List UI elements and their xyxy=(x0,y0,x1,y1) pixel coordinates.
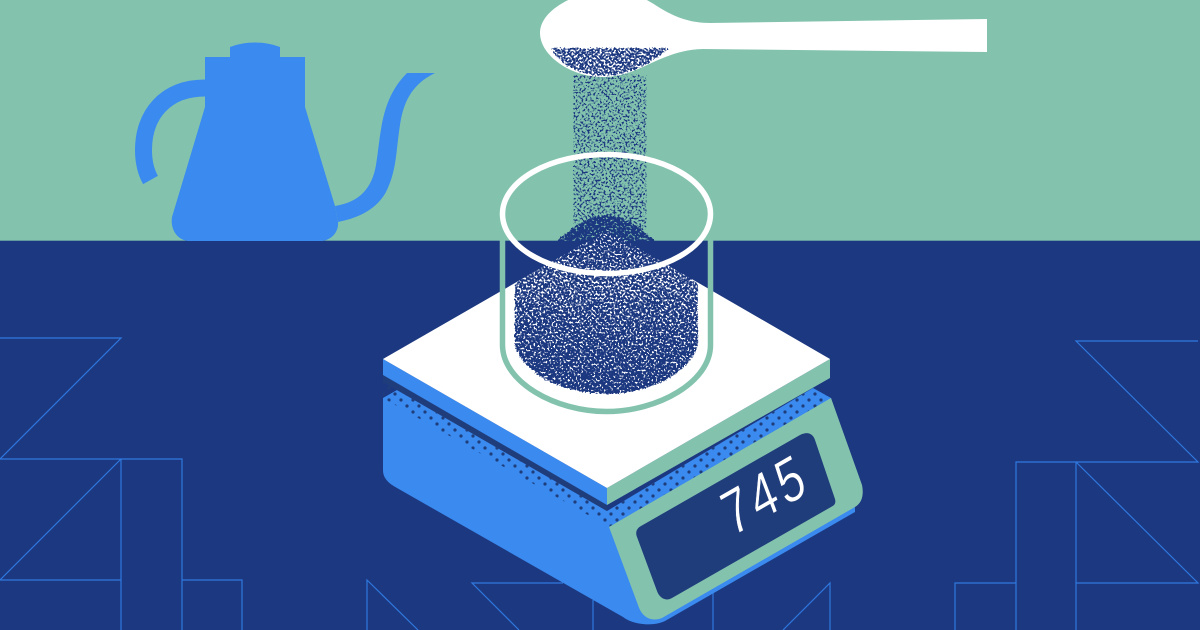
weighing plate right edge xyxy=(607,359,830,505)
coffee grounds pile xyxy=(515,215,698,394)
display reading: 745 xyxy=(712,439,817,549)
background: teal wall xyxy=(0,0,1200,241)
background: navy counter xyxy=(0,241,1200,630)
front face xyxy=(609,398,863,619)
display screen xyxy=(636,433,835,599)
digital kitchen scale xyxy=(383,230,863,624)
weighing plate top xyxy=(383,230,830,488)
shadow strip under plate xyxy=(383,375,607,511)
kettle handle xyxy=(144,88,205,180)
falling coffee grounds xyxy=(574,75,647,230)
geometric line pattern: bottom centre xyxy=(367,580,830,630)
geometric line pattern: right xyxy=(955,341,1198,630)
beaker walls xyxy=(502,240,710,412)
coffee grounds in spoon xyxy=(551,48,670,76)
kettle body xyxy=(172,42,338,241)
kettle spout xyxy=(335,73,435,222)
geometric line pattern: left xyxy=(0,338,242,630)
beaker rim xyxy=(502,154,710,274)
weighing plate left edge xyxy=(383,359,607,505)
spoon xyxy=(540,0,987,77)
halftone dots on body xyxy=(383,382,831,527)
scale body xyxy=(383,388,855,624)
icon: gooseneck kettle xyxy=(144,42,435,241)
